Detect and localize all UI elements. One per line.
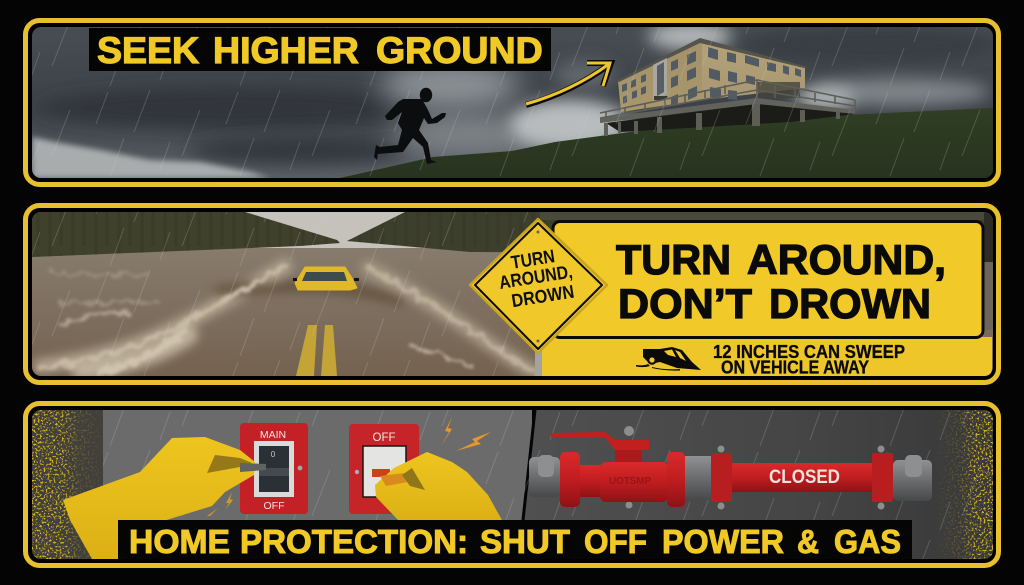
main breaker switch <box>240 423 308 514</box>
panel frame: home protection <box>26 404 998 566</box>
submerged yellow car <box>293 267 359 290</box>
hill <box>340 108 993 178</box>
sign caption: ON VEHICLE AWAY <box>721 358 869 378</box>
left yellow glove <box>63 437 266 559</box>
road lines <box>296 325 337 376</box>
main breaker switch: 0 <box>271 450 276 459</box>
sign caption <box>713 342 905 378</box>
panel frame: seek higher ground <box>26 20 998 184</box>
heading: home protection: PROTECTION: <box>240 523 468 560</box>
sign headline line two: DROWN <box>769 280 931 327</box>
streaked strip right <box>984 262 993 330</box>
heading: seek higher ground <box>89 28 551 71</box>
icon: sinking car <box>636 347 701 371</box>
pipe label: CLOSED <box>769 467 840 488</box>
heading: home protection: & <box>797 523 819 560</box>
storm scene <box>32 22 1000 178</box>
icon: running figure <box>374 88 446 164</box>
rain overlay <box>32 212 552 376</box>
soft foam underlay <box>40 266 535 372</box>
utility wall scene <box>32 410 993 559</box>
sign headline: TURN <box>616 236 731 283</box>
panel: home protection <box>26 404 998 566</box>
diamond warning sign: AROUND, <box>497 261 574 293</box>
heading: home protection <box>118 520 912 560</box>
heading: seek higher ground: HIGHER <box>213 29 359 71</box>
off switch: OFF <box>372 432 396 444</box>
water foam <box>40 266 535 372</box>
rain overlay <box>103 410 993 559</box>
diamond warning sign: TURN <box>509 245 556 273</box>
right yellow glove <box>375 452 503 522</box>
panel frame: flooded road <box>26 206 998 382</box>
rain overlay <box>32 27 993 178</box>
post <box>535 350 542 376</box>
panel: seek higher ground <box>26 20 1000 184</box>
heading: seek higher ground: GROUND <box>376 29 543 71</box>
heading: seek higher ground: SEEK <box>97 29 199 71</box>
icon: electric sparks <box>207 417 491 516</box>
building on stilts <box>600 38 855 136</box>
gas valve and pipe: UOTSMP <box>609 476 651 487</box>
diamond warning sign <box>470 219 607 353</box>
off switch <box>349 424 419 514</box>
heading: home protection: SHUT <box>480 523 570 560</box>
sign panel <box>553 222 983 338</box>
sign headline line two: DON’T <box>618 280 752 327</box>
gas valve and pipe <box>529 426 932 510</box>
sign caption: 12 INCHES CAN SWEEP <box>713 342 905 362</box>
heading: home protection: POWER <box>662 523 784 560</box>
yellow speckle right <box>935 410 993 559</box>
heading: home protection: HOME <box>129 523 230 560</box>
sign headline: AROUND, <box>747 236 946 283</box>
heading: home protection: GAS <box>834 523 901 560</box>
main breaker switch: MAIN <box>260 429 286 441</box>
upper strip <box>540 212 993 220</box>
arrow to building <box>526 63 611 105</box>
diamond warning sign: DROWN <box>510 281 576 311</box>
flooded road scene <box>32 212 993 376</box>
heading: home protection: OFF <box>584 523 647 560</box>
main breaker switch: OFF <box>264 500 284 512</box>
yellow speckle left <box>32 410 107 559</box>
panel: turn around don't drown <box>26 206 998 382</box>
yellow banner lower <box>542 337 992 376</box>
